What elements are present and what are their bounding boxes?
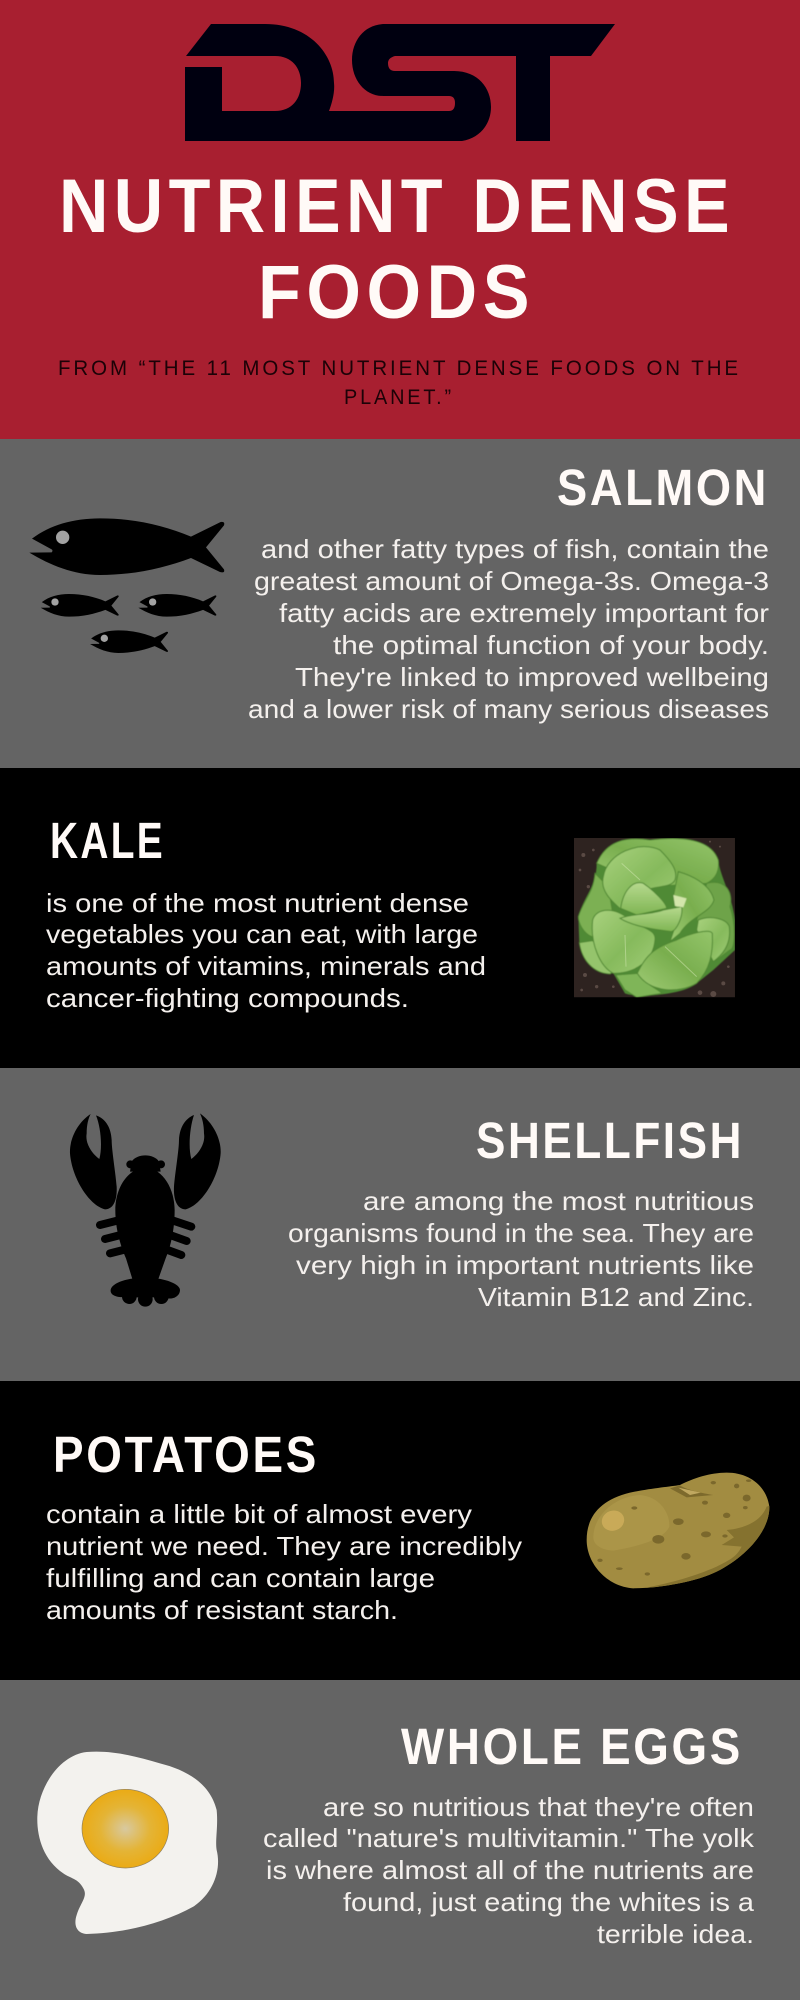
subtitle: PLANET.”	[344, 386, 454, 409]
image: kale plant	[574, 838, 735, 997]
logo: DST	[185, 24, 615, 141]
text: salmon description: and other fatty types of fish, contain the	[261, 534, 769, 564]
heading: shellfish: SHELLFISH	[476, 1112, 744, 1169]
title: FOODS	[258, 250, 535, 335]
title	[59, 164, 735, 335]
text: potatoes description: nutrient we need. They are incredibly	[46, 1531, 522, 1561]
text: whole eggs description	[263, 1792, 755, 1949]
icon: school of fish	[29, 518, 224, 653]
heading: potatoes: POTATOES	[53, 1426, 319, 1483]
subtitle	[58, 357, 741, 409]
text: potatoes description	[46, 1499, 522, 1625]
panel: shellfish	[0, 1068, 800, 1381]
heading: salmon: SALMON	[557, 459, 769, 516]
text: shellfish description: are among the most nutritious	[363, 1186, 754, 1216]
text: salmon description: They're linked to improved wellbeing	[295, 662, 769, 692]
heading: kale: KALE	[50, 812, 165, 869]
text: whole eggs description: called "nature's multivitamin." The yolk	[263, 1823, 755, 1853]
text: whole eggs description: are so nutritious that they're often	[323, 1792, 754, 1822]
text: kale description: vegetables you can eat, with large	[46, 919, 478, 949]
icon: lobster	[70, 1113, 221, 1307]
text: kale description	[46, 888, 486, 1013]
panel: whole eggs	[0, 1680, 800, 2000]
text: salmon description: and a lower risk of many serious diseases	[248, 694, 769, 724]
text: potatoes description: amounts of resistant starch.	[46, 1595, 398, 1625]
icon: potato	[587, 1473, 772, 1592]
text: shellfish description: organisms found in the sea. They are	[288, 1218, 754, 1248]
text: kale description: amounts of vitamins, minerals and	[46, 951, 486, 981]
text: whole eggs description: is where almost all of the nutrients are	[266, 1855, 754, 1885]
panel: kale	[46, 822, 735, 1012]
panel: header	[0, 0, 800, 439]
text: whole eggs description: found, just eating the whites is a	[343, 1887, 755, 1917]
text: salmon description	[248, 534, 769, 724]
text: kale description: cancer-fighting compounds.	[46, 983, 409, 1013]
text: salmon description: greatest amount of Omega-3s. Omega-3	[254, 566, 769, 596]
subtitle: FROM “THE 11 MOST NUTRIENT DENSE FOODS ON THE	[58, 357, 741, 380]
text: potatoes description: fulfilling and can contain large	[46, 1563, 435, 1593]
icon: fried egg	[37, 1752, 218, 1934]
text: shellfish description: Vitamin B12 and Zinc.	[478, 1282, 754, 1312]
text: shellfish description	[288, 1186, 754, 1312]
panel: potatoes	[46, 1436, 770, 1620]
text: kale description: is one of the most nutrient dense	[46, 888, 469, 918]
text: salmon description: fatty acids are extremely important for	[279, 598, 769, 628]
text: shellfish description: very high in important nutrients like	[296, 1250, 754, 1280]
text: potatoes description: contain a little bit of almost every	[46, 1499, 472, 1529]
text: salmon description: the optimal function of your body.	[333, 630, 769, 660]
heading: whole eggs: WHOLE EGGS	[401, 1718, 743, 1775]
text: whole eggs description: terrible idea.	[597, 1919, 754, 1949]
panel: salmon	[0, 439, 800, 768]
title: NUTRIENT DENSE	[59, 164, 735, 249]
